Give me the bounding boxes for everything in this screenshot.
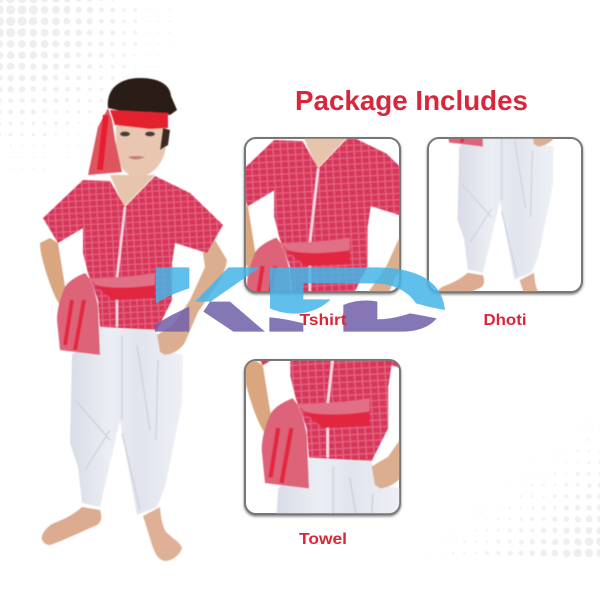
label: Towel: Towel xyxy=(299,531,347,548)
title: Package Includes xyxy=(295,85,528,116)
panel: dhoti card xyxy=(425,136,585,296)
label: Tshirt: Tshirt xyxy=(300,312,347,329)
watermark logo xyxy=(155,267,445,332)
background dots: bottom right xyxy=(410,402,600,560)
background dots: top left xyxy=(0,0,160,160)
panel: towel card xyxy=(242,358,403,518)
panel: tshirt card xyxy=(242,136,403,296)
label: Dhoti: Dhoti xyxy=(484,312,526,329)
main figure: boy in costume xyxy=(40,78,227,561)
